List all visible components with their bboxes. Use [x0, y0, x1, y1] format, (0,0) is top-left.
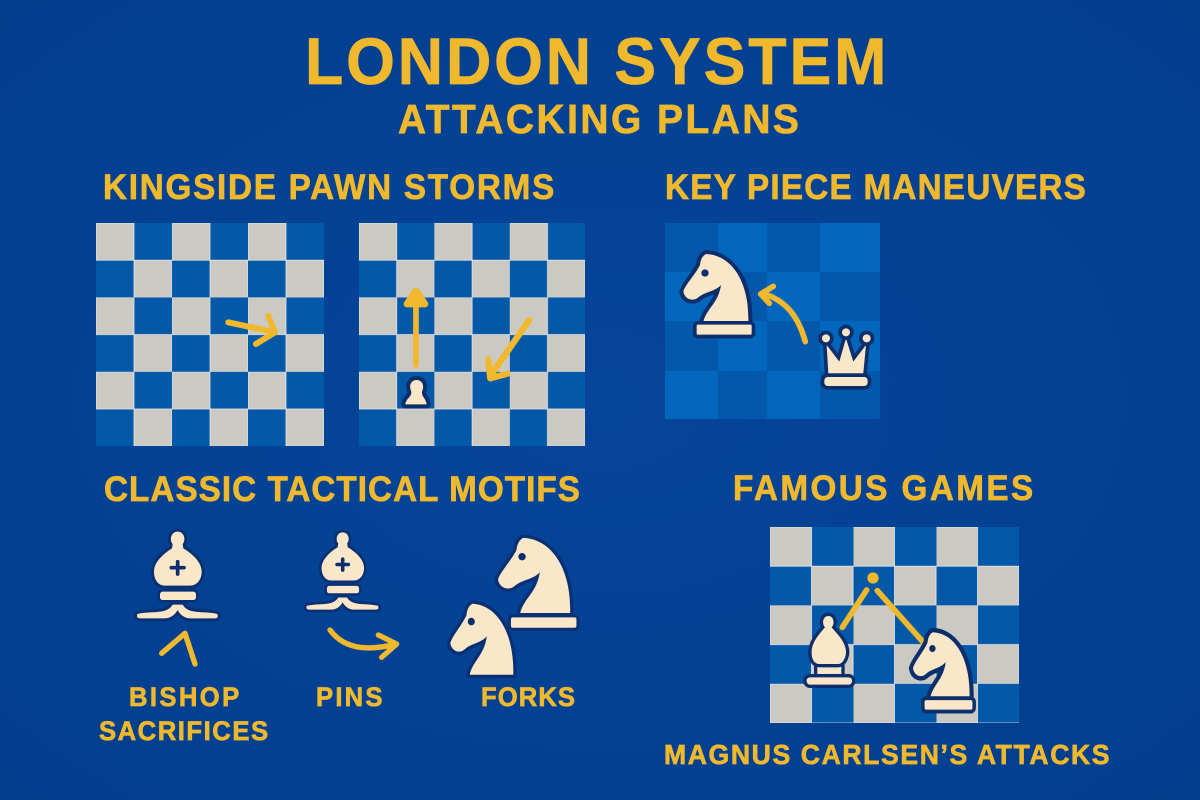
heading: famous games: FAMOUS GAMES	[733, 469, 1033, 508]
panel: pins	[306, 532, 397, 712]
arrow: diagonal right	[228, 316, 275, 344]
icon: bishop	[807, 616, 852, 685]
icon: large knight	[498, 538, 576, 628]
icon: bishop	[306, 532, 378, 610]
icon: attack lines and target	[842, 572, 923, 642]
subtitle: ATTACKING PLANS	[398, 97, 799, 142]
label: forks: FORKS	[481, 681, 575, 712]
icon: small knight	[450, 604, 513, 675]
panel: forks	[450, 538, 576, 712]
heading: classic tactical motifs: CLASSIC TACTICAL MOTIFS	[104, 470, 580, 509]
label: pins: PINS	[316, 681, 383, 712]
panel: key piece maneuvers board	[665, 223, 880, 419]
arrow: chevron	[162, 633, 195, 664]
arrows: pawn advance and diagonal	[407, 291, 529, 378]
label: bishop sacrifices: BISHOP	[129, 681, 239, 712]
panel: first pawn storm board	[96, 223, 324, 446]
arrow: curved right	[330, 630, 397, 657]
label: bishop sacrifices: SACRIFICES	[99, 715, 268, 746]
heading: kingside pawn storms: KINGSIDE PAWN STORMS	[103, 168, 554, 207]
label: bishop sacrifices	[99, 681, 268, 746]
caption: magnus carlsen's attacks: MAGNUS CARLSEN’S ATTACKS	[664, 738, 1110, 770]
panel: second pawn storm board	[359, 223, 585, 446]
title: LONDON SYSTEM	[305, 25, 886, 98]
icon: knight	[913, 632, 972, 710]
icon: queen	[822, 328, 871, 386]
icon: knight	[683, 254, 752, 335]
panel: bishop sacrifices	[99, 532, 268, 746]
icon: pawn	[405, 380, 427, 404]
arrow: queen to knight	[761, 286, 805, 342]
panel: famous games board	[770, 527, 1019, 723]
icon: bishop	[137, 532, 218, 618]
heading: key piece maneuvers: KEY PIECE MANEUVERS	[665, 168, 1086, 207]
